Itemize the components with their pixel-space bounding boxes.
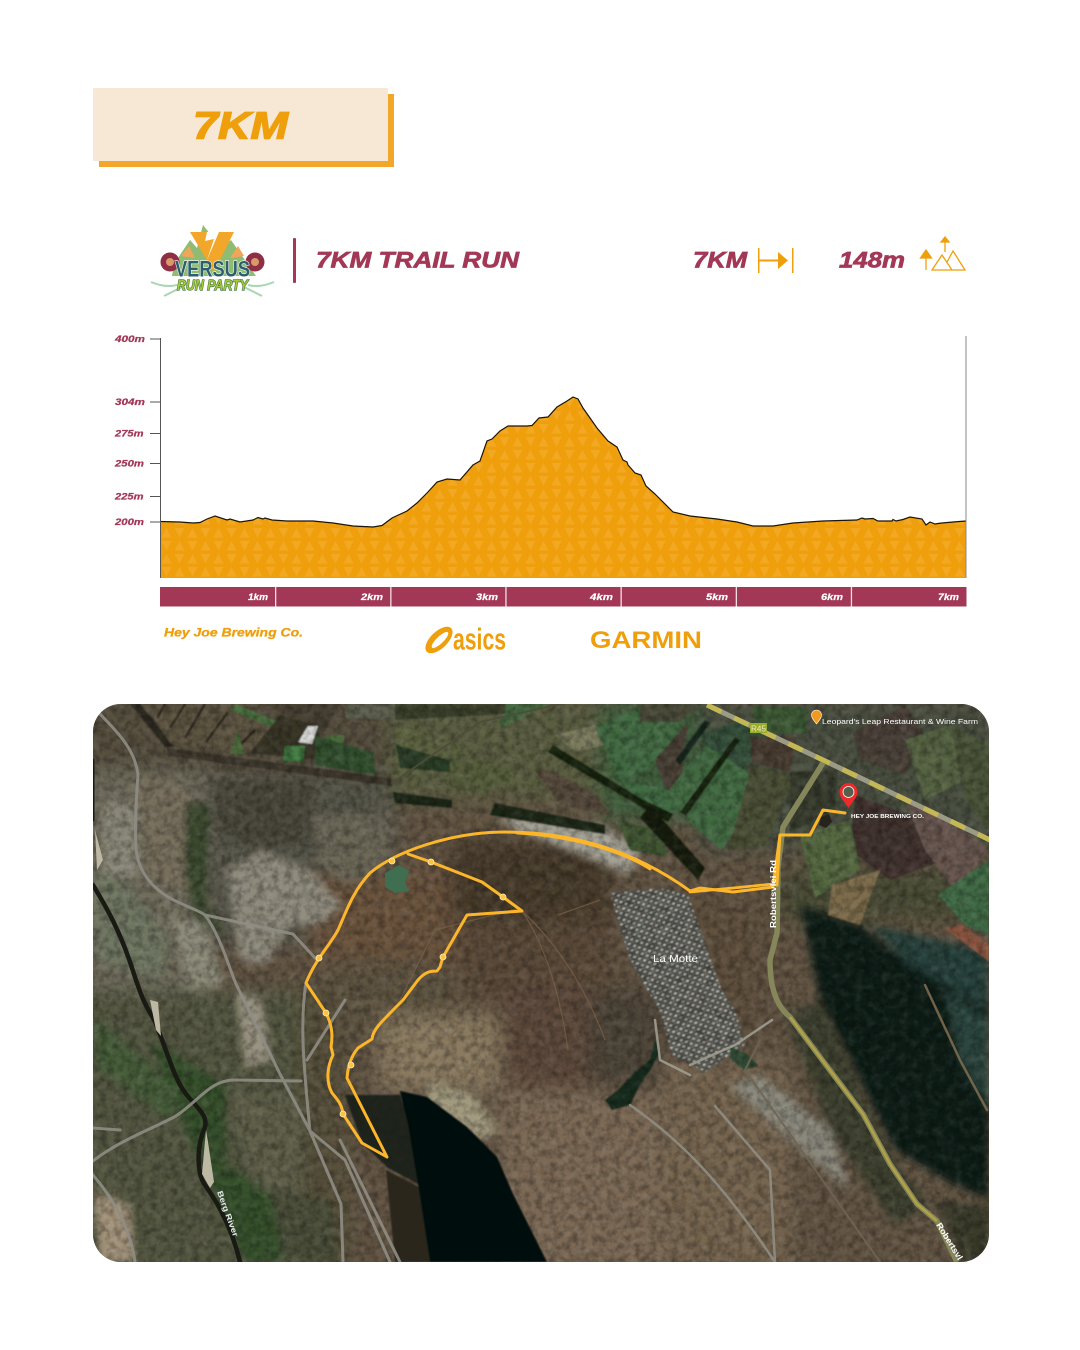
sponsor: asics [421, 622, 506, 658]
dirt roads [93, 704, 987, 1262]
stat: distance 7KM: 7KM [693, 248, 748, 272]
sponsor: Garmin: GARMIN [590, 627, 702, 654]
lake [385, 865, 409, 893]
tree clump [605, 1040, 660, 1110]
y axis labels: 275m [114, 428, 144, 440]
satellite map [80, 695, 1000, 1280]
logo: Versus Run Party: RUN PARTY [177, 277, 250, 294]
title badge: 7KM: 7KM [193, 106, 290, 148]
distance bar: 3km [476, 592, 499, 603]
place label: Robertsvlei lower: Robertsvl [934, 1221, 965, 1262]
divider [293, 238, 296, 283]
stat: elevation 148m: 148m [839, 248, 905, 272]
y axis labels: 250m [114, 458, 145, 470]
place label: Berg River: Berg River [215, 1190, 240, 1238]
stat: distance 7KM [693, 248, 794, 273]
vegetation [150, 1040, 285, 1262]
place label: La Motte: La Motte [653, 954, 698, 965]
icon: mountains with arrows [920, 237, 965, 270]
NE parcels [853, 705, 925, 775]
green parcels [555, 725, 605, 752]
logo: Versus Run Party [151, 225, 274, 296]
road badge: R45: R45 [751, 724, 767, 734]
distance bar: 7km [938, 592, 960, 603]
icon: distance arrow [758, 248, 794, 273]
La Motte town [610, 888, 745, 1072]
distance bar [160, 587, 966, 606]
axes [150, 336, 966, 578]
place label: Leopard's Leap: Leopard's Leap Restaurant & Wine Farm [822, 717, 978, 726]
pale scrub patches [226, 850, 343, 965]
y axis labels [114, 334, 146, 528]
pin: Hey Joe Brewing Co.: HEY JOE BREWING CO. [851, 814, 925, 820]
place label: Leopard's Leap [812, 710, 978, 726]
cliff shadow [345, 1091, 547, 1262]
area: elevation profile [160, 397, 966, 578]
river [93, 760, 240, 1262]
striped fields top left [130, 704, 175, 748]
distance bar: 4km [589, 592, 614, 603]
title badge: 7KM [93, 88, 394, 167]
top mid pasture [395, 724, 470, 778]
main road R45 [707, 705, 990, 840]
distance bar: 6km [821, 592, 844, 603]
y axis labels: 400m [114, 334, 146, 345]
y axis labels: 200m [114, 517, 145, 528]
noise texture [93, 704, 989, 1262]
elevation chart [114, 334, 966, 578]
dark mountain on the right [800, 905, 989, 1200]
heading: 7KM Trail Run: 7KM TRAIL RUN [316, 248, 520, 272]
road Robertsvlei [770, 763, 957, 1262]
distance bar: 1km [248, 592, 269, 603]
distance bar: 5km [706, 592, 729, 603]
stat: elevation 148m [839, 237, 965, 272]
route waypoints [316, 858, 506, 1117]
sponsor: asics: asics [453, 622, 506, 656]
logo: Versus Run Party: VERSUS [175, 256, 250, 282]
sponsor: Hey Joe Brewing Co.: Hey Joe Brewing Co. [164, 628, 303, 640]
terrain base [80, 695, 1000, 1280]
y axis labels: 225m [114, 492, 144, 502]
farm track top left [166, 748, 392, 786]
distance bar: 2km [360, 592, 384, 603]
trail route [306, 810, 845, 1157]
tree lines [548, 745, 673, 822]
y axis labels: 304m [115, 397, 146, 408]
place label: Robertsvlei Rd: Robertsvlei Rd [768, 860, 778, 928]
pin: Hey Joe Brewing Co. [840, 783, 925, 820]
